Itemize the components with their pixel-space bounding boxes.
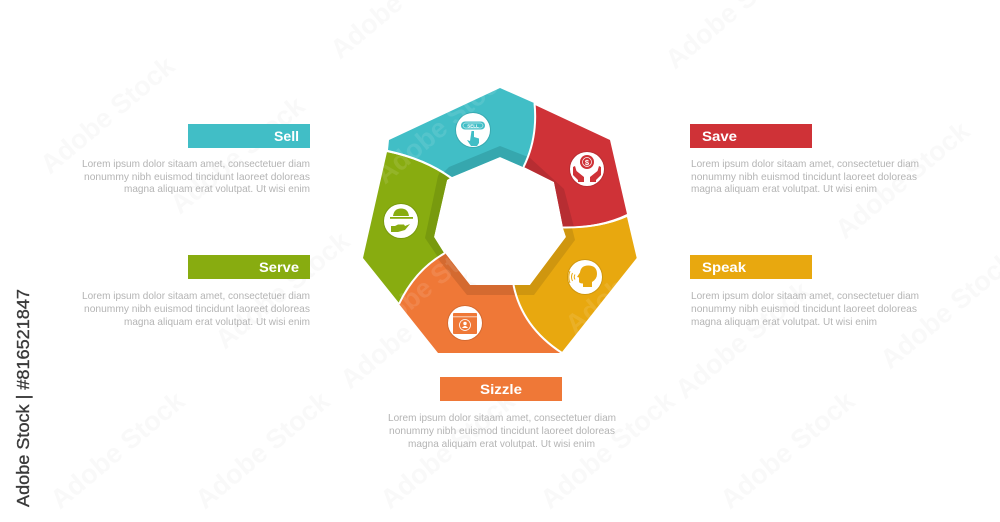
segment: sizzle xyxy=(399,253,561,353)
segment: sell xyxy=(388,88,535,177)
label: save xyxy=(690,124,812,148)
watermark pattern: Adobe Stock xyxy=(715,385,861,515)
stock id caption: Adobe Stock | #816521847 xyxy=(13,289,33,507)
watermark pattern: Adobe Stock xyxy=(35,50,181,180)
watermark overlay on diagram: Adobe Stock xyxy=(370,60,516,190)
segment: save xyxy=(524,105,627,227)
label: speak: Speak xyxy=(702,259,746,275)
text: speak description: Lorem ipsum dolor sitaam amet, consectetuer diam xyxy=(691,290,919,302)
text: serve description: Lorem ipsum dolor sitaam amet, consectetuer diam xyxy=(82,290,310,302)
label: sizzle: Sizzle xyxy=(480,381,522,397)
segment: speak xyxy=(514,217,637,352)
segment: serve xyxy=(363,152,450,303)
text: sell description xyxy=(82,158,310,195)
label: serve xyxy=(188,255,310,279)
text: sell description: nonummy nibh euismod tincidunt laoreet doloreas xyxy=(84,171,310,183)
watermark pattern: Adobe Stock xyxy=(210,225,356,355)
icon: hands holding coin xyxy=(569,151,605,187)
icon: speaking head xyxy=(567,259,603,295)
watermark pattern: Adobe Stock xyxy=(830,115,976,245)
watermark pattern: Adobe Stock xyxy=(670,275,816,405)
text: sell description: Lorem ipsum dolor sitaam amet, consectetuer diam xyxy=(82,158,310,170)
icon: sell button and pointer xyxy=(455,112,491,148)
watermark overlay on diagram xyxy=(355,60,706,350)
text: speak description: nonummy nibh euismod tincidunt laoreet doloreas xyxy=(691,303,917,315)
label: save: Save xyxy=(702,128,737,144)
watermark pattern: Adobe Stock xyxy=(45,385,191,515)
label: serve: Serve xyxy=(259,259,299,275)
heptagon cycle diagram xyxy=(355,60,706,353)
watermark overlay on diagram: Adobe Stock xyxy=(355,220,501,350)
text: sizzle description: Lorem ipsum dolor sitaam amet, consectetuer diam xyxy=(388,412,616,424)
watermark pattern: Adobe Stock xyxy=(535,385,681,515)
label: sell: Sell xyxy=(274,128,299,144)
icon: serving cloche on hand xyxy=(383,203,419,239)
watermark overlay on diagram: Adobe Stock xyxy=(560,210,706,340)
text: speak description xyxy=(691,290,919,328)
text: save description: magna aliquam erat volutpat. Ut wisi enim xyxy=(691,183,877,195)
icon: browser window with user xyxy=(447,305,483,341)
icon: sell button and pointer: SELL xyxy=(467,124,479,128)
text: save description: Lorem ipsum dolor sitaam amet, consectetuer diam xyxy=(691,158,919,170)
label: sell xyxy=(188,124,310,148)
text: serve description xyxy=(82,290,310,328)
text: serve description: magna aliquam erat volutpat. Ut wisi enim xyxy=(124,316,310,328)
watermark pattern: Adobe Stock xyxy=(335,265,481,395)
watermark pattern: Adobe Stock xyxy=(190,385,336,515)
icon: hands holding coin: $ xyxy=(585,158,590,167)
text: save description xyxy=(691,158,919,195)
text: sizzle description: magna aliquam erat volutpat. Ut wisi enim xyxy=(408,438,595,450)
text: save description: nonummy nibh euismod tincidunt laoreet doloreas xyxy=(691,171,917,183)
text: sizzle description: nonummy nibh euismod tincidunt laoreet doloreas xyxy=(389,425,615,437)
text: sell description: magna aliquam erat volutpat. Ut wisi enim xyxy=(124,183,310,195)
text: speak description: magna aliquam erat volutpat. Ut wisi enim xyxy=(691,316,877,328)
watermark pattern: Adobe Stock xyxy=(375,385,521,515)
text: sizzle description xyxy=(388,412,616,450)
text: serve description: nonummy nibh euismod tincidunt laoreet doloreas xyxy=(84,303,310,315)
watermark pattern: Adobe Stock xyxy=(165,90,311,220)
label: sizzle xyxy=(440,377,562,401)
white curved dividers xyxy=(387,103,628,353)
label: speak xyxy=(690,255,812,279)
